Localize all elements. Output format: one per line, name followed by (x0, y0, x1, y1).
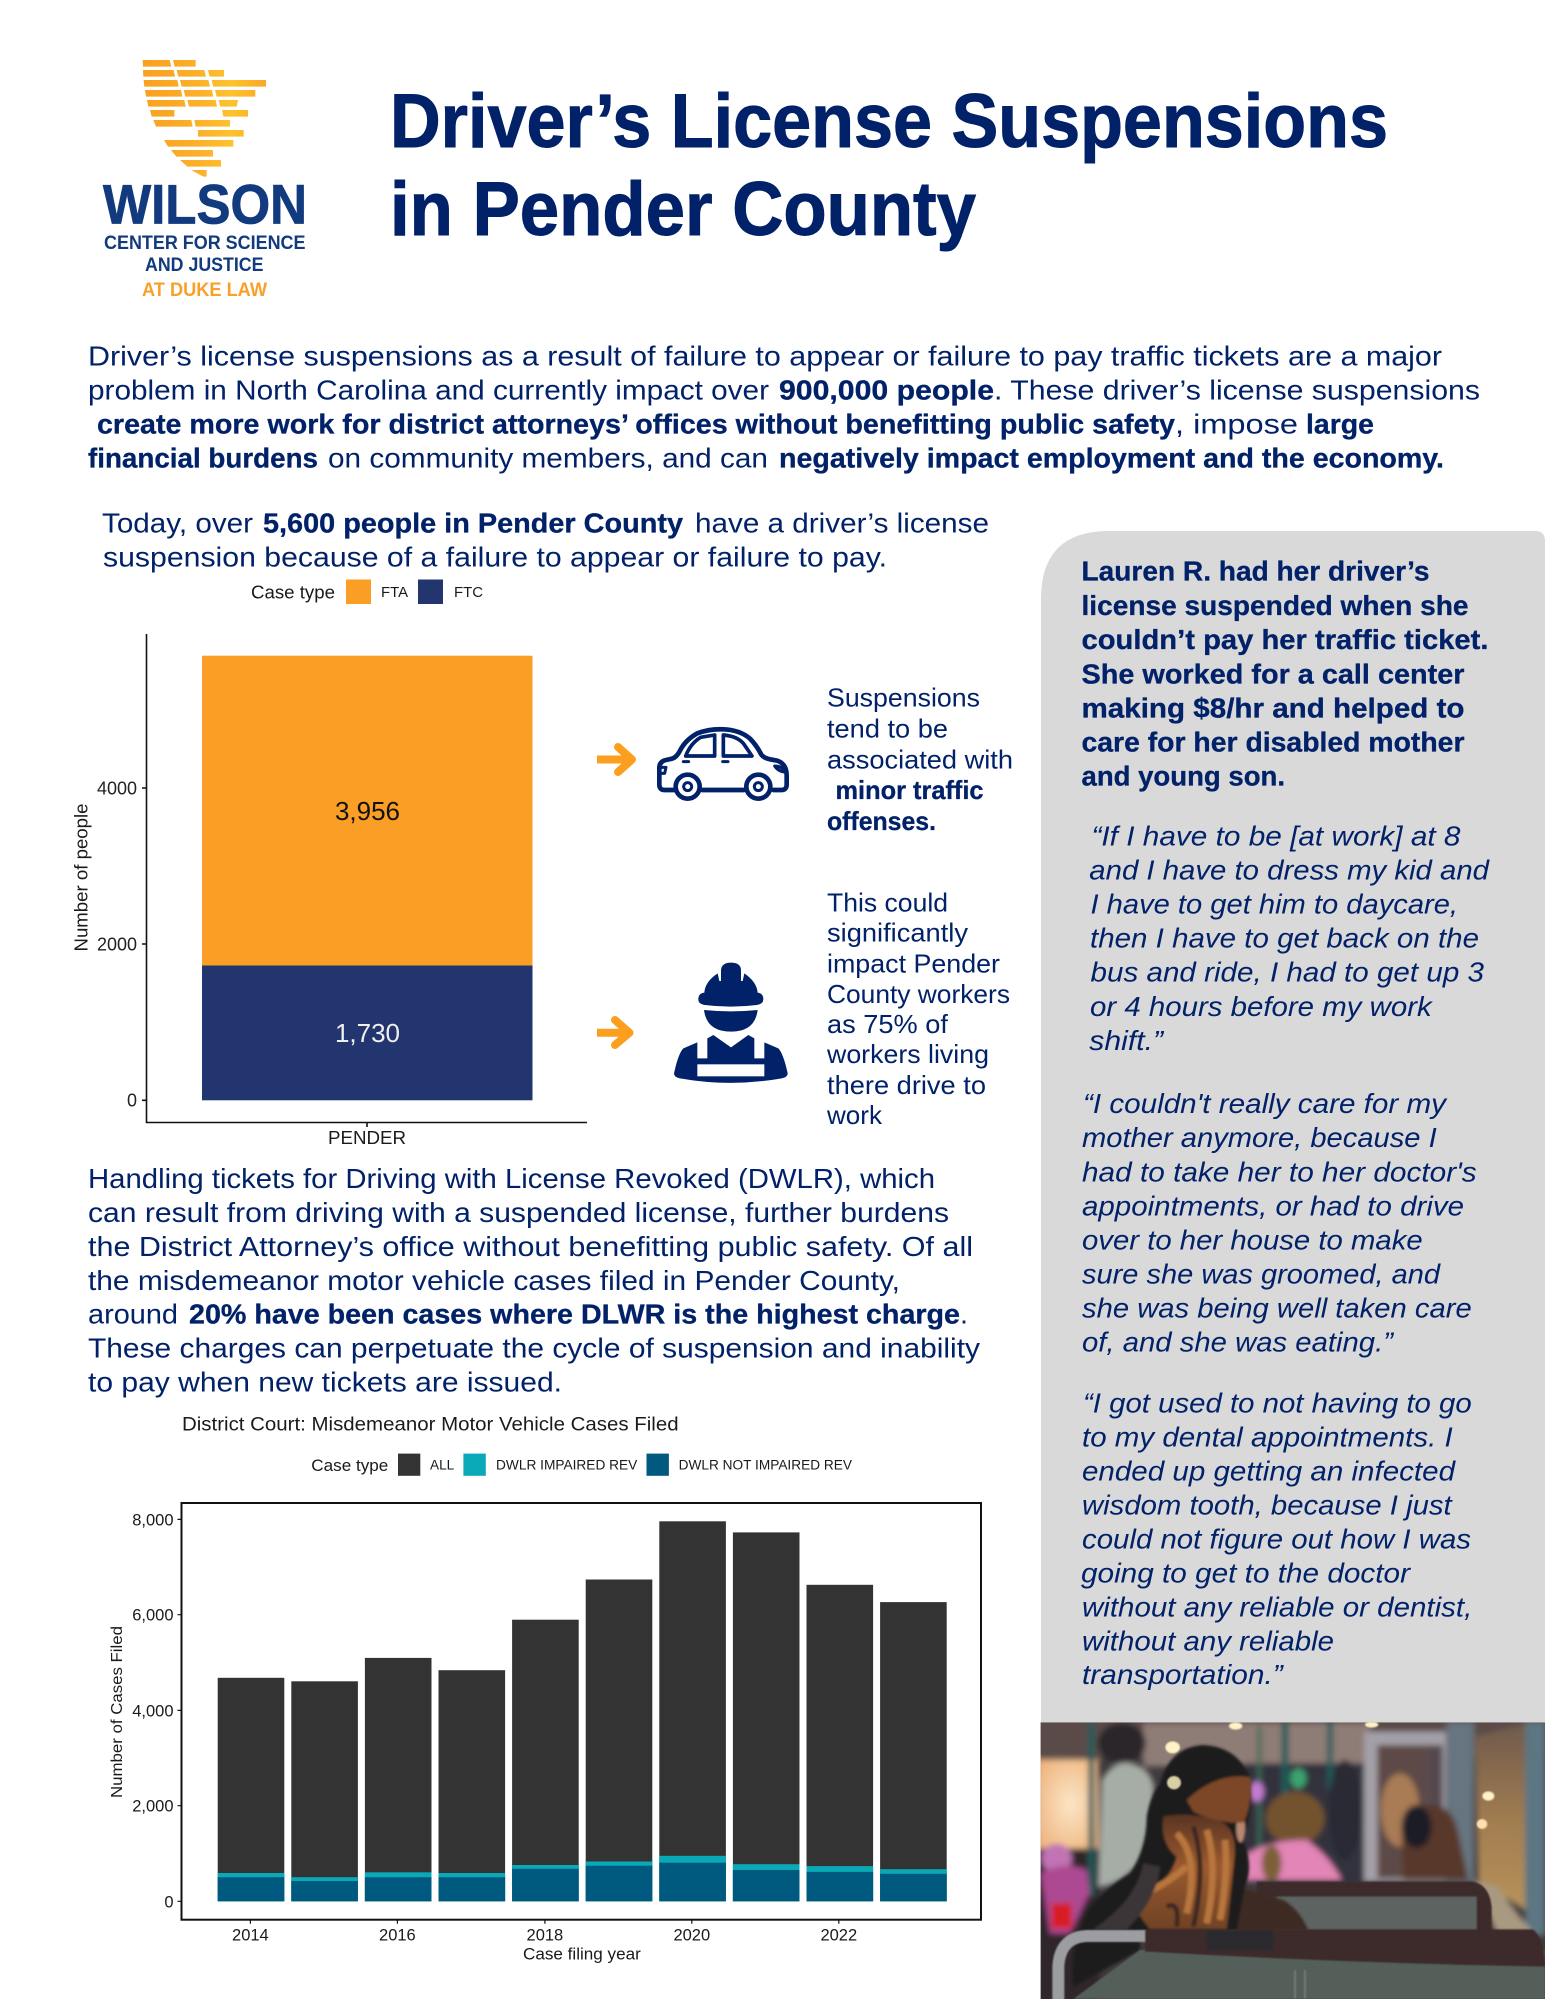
quote 1: “If I have to be [at work] at 8 (1092, 821, 1461, 852)
quote 1: then I have to get back on the (1090, 922, 1479, 954)
arrow: to car (597, 747, 632, 772)
bar: FTA 3,956 (202, 656, 532, 966)
chart title: District Court: Misdemeanor Motor Vehicle Cases Filed (182, 1414, 679, 1436)
x label: PENDER (328, 1127, 406, 1148)
dark figure in aisle (1328, 1758, 1352, 1794)
quote 2 (1082, 1088, 1477, 1358)
lights (1165, 1722, 1494, 1829)
chart legend (251, 580, 483, 604)
bar: FTC 1,730: 1,730 (335, 1018, 400, 1048)
intro paragraph: problem in North Carolina and currently impact over (88, 374, 769, 405)
quote 3: going to get to the doctor (1081, 1558, 1412, 1589)
text: DWLR paragraph: can result from driving with a suspended license, further burdens (88, 1197, 949, 1228)
quote 3 (1081, 1388, 1472, 1690)
chart axes (142, 634, 587, 1127)
text: impact on workers: County workers (827, 979, 1010, 1009)
bars: DWLR not impaired (218, 1863, 947, 1901)
intro paragraph: Driver’s license suspensions as a result of failure to appear or failure to pay traffic tickets are a major (88, 340, 1442, 372)
logo mark: striped shield (143, 60, 266, 177)
y tick labels: 6,000 (132, 1607, 174, 1625)
quote 1: bus and ride, I had to get up 3 (1090, 956, 1485, 987)
text: impact on workers: This could (827, 888, 948, 918)
chart legend: DWLR NOT IMPAIRED REV (679, 1458, 852, 1473)
passenger with braid (1266, 1792, 1324, 1845)
title: Driver’s License Suspensions (390, 79, 1388, 164)
text: Pender County suspensions summary (102, 508, 989, 573)
quote 3: ended up getting an infected (1082, 1456, 1457, 1486)
quote 1: shift.” (1089, 1025, 1165, 1056)
text: minor traffic offenses: minor traffic (836, 775, 984, 805)
text: impact on workers: impact Pender (827, 949, 1000, 979)
y tick labels (97, 778, 137, 1110)
text: impact on workers (826, 888, 1010, 1130)
y axis title: Number of people (72, 804, 92, 952)
text: DWLR paragraph: around (88, 1298, 178, 1330)
story intro: She worked for a call center (1082, 658, 1465, 689)
y tick labels: 0 (164, 1893, 174, 1911)
plot frame and ticks (178, 1503, 981, 1924)
front seat with rail (1058, 1929, 1545, 2000)
intro paragraph: 900,000 people (779, 374, 994, 405)
logo subtitle line 2: AND JUSTICE (145, 254, 264, 276)
quote 3: “I got used to not having to go (1083, 1388, 1472, 1418)
quote 2: “I couldn't really care for my (1083, 1088, 1448, 1119)
story intro: license suspended when she (1082, 590, 1468, 621)
story intro (1082, 556, 1488, 792)
panel background (1041, 531, 1545, 1722)
text: DWLR paragraph: to pay when new tickets are issued. (88, 1366, 562, 1398)
quote 2: appointments, or had to drive (1082, 1190, 1464, 1221)
title (390, 79, 1388, 252)
logo wordmark: WILSON (103, 172, 307, 236)
quote 2: mother anymore, because I (1082, 1122, 1437, 1153)
logo subtitle line 3: AT DUKE LAW (142, 279, 268, 301)
x tick labels: 2018 (527, 1926, 563, 1944)
text: minor traffic offenses: offenses. (827, 806, 936, 836)
text: DWLR paragraph: the misdemeanor motor vehicle cases filed in Pender County, (88, 1265, 900, 1296)
intro paragraph: create more work for district attorneys’ offices without benefitting public safety (97, 408, 1176, 439)
standing passenger (1098, 1723, 1146, 1764)
icon: car (659, 729, 787, 799)
chart legend: DWLR IMPAIRED REV (496, 1458, 637, 1473)
y tick labels: 0 (127, 1090, 137, 1110)
intro paragraph: , impose (1175, 408, 1298, 439)
coloured lights (1249, 1782, 1264, 1802)
text: impact on workers: there drive to (827, 1070, 986, 1100)
quote 1 (1089, 821, 1491, 1056)
intro paragraph: negatively impact employment and the economy. (779, 442, 1444, 473)
intro paragraph: on community members, and can (328, 442, 768, 473)
quote 1: or 4 hours before my work (1090, 991, 1433, 1022)
quote 3: to my dental appointments. I (1082, 1422, 1453, 1452)
story intro: Lauren R. had her driver’s (1082, 556, 1430, 587)
x tick labels: 2016 (379, 1926, 416, 1944)
title: in Pender County (390, 167, 976, 252)
rear seat (1257, 1882, 1492, 1935)
hair clip (1167, 1776, 1181, 1789)
story intro: making $8/hr and helped to (1082, 692, 1464, 724)
panel: Lauren R. story (1041, 531, 1545, 1722)
quote 3: wisdom tooth, because I just (1082, 1490, 1453, 1520)
y axis title: Number of Cases Filed (109, 1626, 126, 1798)
text: impact on workers: significantly (827, 918, 968, 948)
quote 3: without any reliable (1082, 1626, 1334, 1657)
bars: all cases (218, 1521, 947, 1901)
story intro: and young son. (1082, 760, 1285, 792)
text: impact on workers: work (826, 1100, 883, 1130)
bus interior background (1037, 1717, 1545, 2000)
text: Pender County suspensions summary: Today, over (102, 508, 253, 539)
story intro: couldn’t pay her traffic ticket. (1082, 624, 1488, 655)
chart: misdemeanor motor vehicle cases filed (109, 1414, 981, 1964)
bar: FTA 3,956: 3,956 (335, 796, 400, 826)
photo: woman riding a bus (drawn illustration) (1037, 1717, 1545, 2000)
logo: Wilson Center for Science and Justice (103, 60, 307, 301)
text: Pender County suspensions summary: suspension because of a failure to appear or failure to pay. (103, 542, 887, 573)
y tick labels: 4,000 (132, 1702, 174, 1720)
text: minor traffic offenses (827, 683, 1013, 836)
intro paragraph: financial burdens (88, 442, 318, 473)
quote 2: over to her house to make (1082, 1224, 1423, 1256)
arrow: to worker (597, 1020, 630, 1045)
text: impact on workers: workers living (826, 1039, 989, 1069)
text: impact on workers: as 75% of (827, 1009, 949, 1039)
y tick labels: 8,000 (132, 1511, 174, 1529)
intro paragraph (88, 340, 1480, 473)
text: DWLR paragraph: Handling tickets for Driving with License Revoked (DWLR), which (88, 1163, 935, 1194)
chart legend (311, 1454, 852, 1476)
text: minor traffic offenses: Suspensions (827, 683, 980, 713)
story intro: care for her disabled mother (1082, 726, 1465, 757)
x tick labels: 2020 (673, 1926, 710, 1944)
quote 1: and I have to dress my kid and (1089, 855, 1491, 886)
x axis title: Case filing year (523, 1946, 641, 1964)
passenger in right seat (1402, 1805, 1468, 1880)
quote 1: I have to get him to daycare, (1090, 889, 1458, 920)
y tick labels: 2,000 (132, 1798, 174, 1816)
quote 2: of, and she was eating.” (1082, 1327, 1395, 1358)
chart legend: FTC (454, 585, 483, 601)
child in pink (1041, 1844, 1072, 1873)
x tick labels (232, 1926, 857, 1944)
bars: DWLR impaired (218, 1856, 947, 1901)
text: minor traffic offenses: associated with (827, 744, 1013, 774)
text: minor traffic offenses: tend to be (827, 713, 948, 743)
y tick labels (132, 1511, 174, 1911)
chart legend: FTA (381, 585, 408, 601)
icon: construction worker (674, 963, 788, 1083)
text: DWLR paragraph (88, 1163, 980, 1398)
y tick labels: 2000 (97, 934, 137, 954)
window sill (1473, 1880, 1533, 1933)
woman with long hair (1072, 1745, 1308, 1987)
logo subtitle line 1: CENTER FOR SCIENCE (104, 232, 306, 254)
y tick labels: 4000 (97, 778, 137, 798)
text: DWLR paragraph: the District Attorney’s office without benefitting public safety. Of all (88, 1231, 973, 1262)
quote 2: she was being well taken care (1082, 1292, 1472, 1324)
quote 3: could not figure out how I was (1082, 1524, 1471, 1555)
quote 3: without any reliable or dentist, (1082, 1592, 1472, 1623)
intro paragraph: large (1306, 408, 1374, 439)
text: Pender County suspensions summary: have a driver’s license (695, 508, 989, 539)
x tick labels: 2014 (232, 1926, 269, 1944)
text: DWLR paragraph: . (960, 1298, 968, 1330)
text: Pender County suspensions summary: 5,600 people in Pender County (263, 508, 684, 539)
quote 3: transportation.” (1082, 1659, 1285, 1690)
chart: Pender suspensions stacked bar (72, 580, 587, 1148)
x tick labels: 2022 (820, 1926, 857, 1944)
chart legend: Case type (311, 1456, 388, 1475)
text: DWLR paragraph: These charges can perpetuate the cycle of suspension and inability (88, 1332, 980, 1364)
quote 2: had to take her to her doctor's (1082, 1156, 1477, 1187)
bar: FTC 1,730 (202, 966, 532, 1100)
text: DWLR paragraph: 20% have been cases where DLWR is the highest charge (189, 1298, 960, 1330)
intro paragraph: . These driver’s license suspensions (994, 374, 1480, 405)
chart legend: Case type (251, 582, 335, 602)
chart legend: ALL (430, 1458, 455, 1473)
quote 2: sure she was groomed, and (1082, 1258, 1442, 1290)
